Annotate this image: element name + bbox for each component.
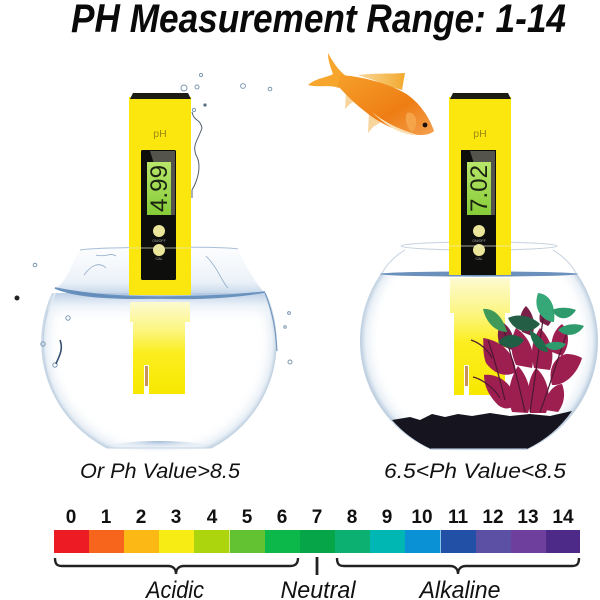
ON/OFF button: ON/OFF — [472, 239, 487, 243]
meter label: pH — [153, 128, 167, 140]
ON/OFF button — [472, 225, 487, 243]
scale numbers: 4 — [207, 507, 218, 528]
colour bar — [54, 530, 580, 553]
water stream — [192, 112, 202, 198]
splash crown — [55, 247, 265, 296]
LCD with reading: 4.99 — [146, 165, 173, 212]
right caption: 6.5<Ph Value<8.5 — [384, 460, 566, 483]
dorsal fin — [358, 73, 405, 90]
green leaves — [483, 293, 584, 352]
scale numbers: 14 — [552, 507, 574, 528]
bowl rim — [382, 242, 576, 273]
lower fins — [345, 92, 359, 109]
goldfish — [308, 53, 434, 135]
scale numbers: 3 — [171, 507, 181, 528]
bowl shadow — [419, 441, 539, 459]
CAL button — [153, 244, 165, 261]
scale numbers: 10 — [411, 507, 433, 528]
scale numbers: 5 — [242, 507, 253, 528]
CAL button: CAL — [476, 257, 482, 261]
bowl glass — [360, 273, 598, 449]
pH scale — [54, 507, 580, 600]
ON/OFF button: ON/OFF — [152, 239, 167, 243]
red leaves — [483, 302, 582, 413]
scale numbers: 8 — [347, 507, 357, 528]
scale numbers: 12 — [482, 507, 504, 528]
water surface — [55, 288, 265, 298]
scale numbers: 13 — [517, 507, 539, 528]
left bowl with splash — [15, 73, 292, 459]
scale numbers: 2 — [136, 507, 146, 528]
LCD with reading: 7.02 — [466, 165, 493, 212]
scale numbers — [66, 507, 574, 528]
left submerged probe — [130, 302, 190, 394]
scale numbers: 0 — [66, 507, 76, 528]
scale numbers: 6 — [277, 507, 287, 528]
meter label: pH — [473, 128, 487, 140]
body — [338, 75, 434, 135]
CAL button: CAL — [156, 257, 162, 261]
acidic brace — [55, 558, 298, 574]
meter screen panel — [461, 150, 496, 275]
meter screen panel — [141, 150, 176, 280]
belly highlight — [372, 112, 418, 135]
scale numbers: 7 — [312, 507, 322, 528]
right pH meter — [449, 93, 511, 275]
gill and eye — [406, 113, 427, 132]
scale numbers: 1 — [101, 507, 112, 528]
water top band — [46, 293, 272, 325]
alkaline brace — [337, 558, 579, 574]
droplets — [15, 73, 292, 367]
CAL button — [473, 244, 485, 261]
aquarium plant — [471, 293, 584, 413]
right bowl — [360, 242, 598, 459]
running water on bowl — [265, 293, 277, 351]
right submerged probe — [450, 278, 510, 395]
tail — [308, 53, 346, 88]
scale numbers: 9 — [382, 507, 392, 528]
bowl glass — [41, 293, 277, 448]
left caption: Or Ph Value>8.5 — [80, 460, 240, 483]
bowl shadow — [101, 441, 217, 459]
neutral tick — [316, 557, 318, 575]
water surface — [380, 271, 578, 277]
left pH meter — [129, 93, 191, 295]
gravel — [392, 411, 572, 449]
ON/OFF button — [152, 225, 167, 243]
scale numbers: 11 — [448, 507, 468, 528]
stems — [471, 305, 570, 412]
